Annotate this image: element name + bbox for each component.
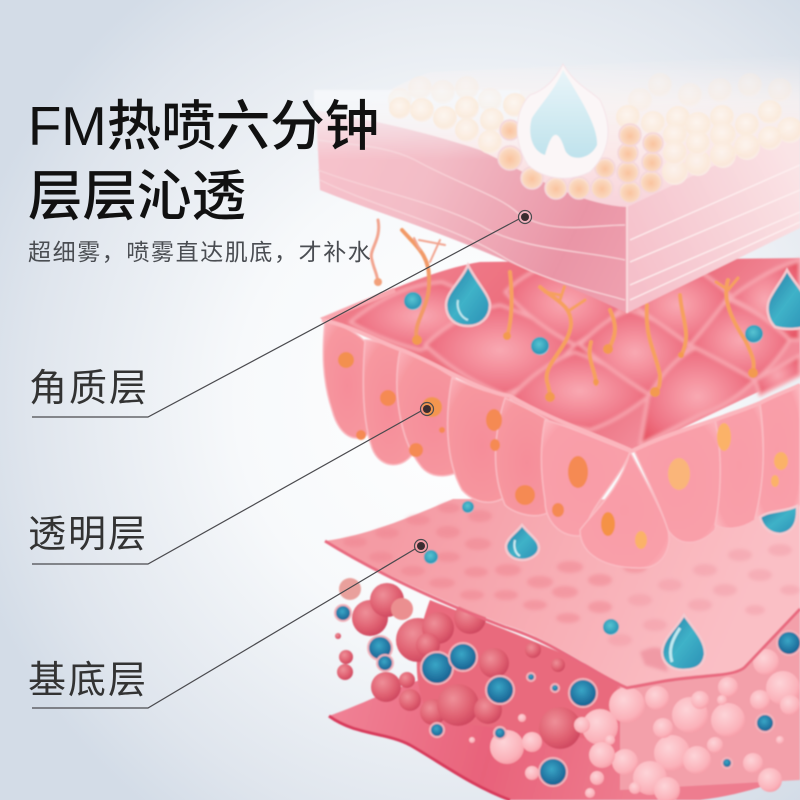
leader: 基底层 xyxy=(32,540,428,708)
icon: white water drop xyxy=(517,64,608,178)
cell nuclei xyxy=(338,352,788,549)
label: 角质层: 角质层 xyxy=(29,368,149,410)
dimples on sheet xyxy=(343,503,647,623)
label: 基底层: 基底层 xyxy=(28,660,148,702)
left face xyxy=(316,110,627,313)
leader: 透明层 xyxy=(32,402,434,564)
title: 层层沁透 xyxy=(28,166,246,227)
layer: middle sheet xyxy=(325,499,800,688)
layer: base sheet xyxy=(329,670,800,800)
cream balls xyxy=(388,73,792,112)
cell mounds xyxy=(350,260,800,445)
right face xyxy=(627,125,800,313)
layer: cell wall petals xyxy=(323,322,800,568)
subtitle: 超细雾，喷雾直达肌底，才补水 xyxy=(28,239,372,265)
label: 透明层: 透明层 xyxy=(28,514,148,556)
water droplets xyxy=(404,265,800,670)
layer: cell surface xyxy=(320,258,800,452)
leader: 角质层 xyxy=(32,210,532,417)
tendril tips xyxy=(374,278,758,402)
bubbles: base layer xyxy=(335,578,800,800)
illustration: skin layers xyxy=(314,55,800,800)
tendrils xyxy=(371,220,754,400)
layer: top surface xyxy=(314,55,800,313)
title xyxy=(28,96,379,227)
title: FM热喷六分钟 xyxy=(28,96,379,157)
cell rim xyxy=(322,320,800,451)
